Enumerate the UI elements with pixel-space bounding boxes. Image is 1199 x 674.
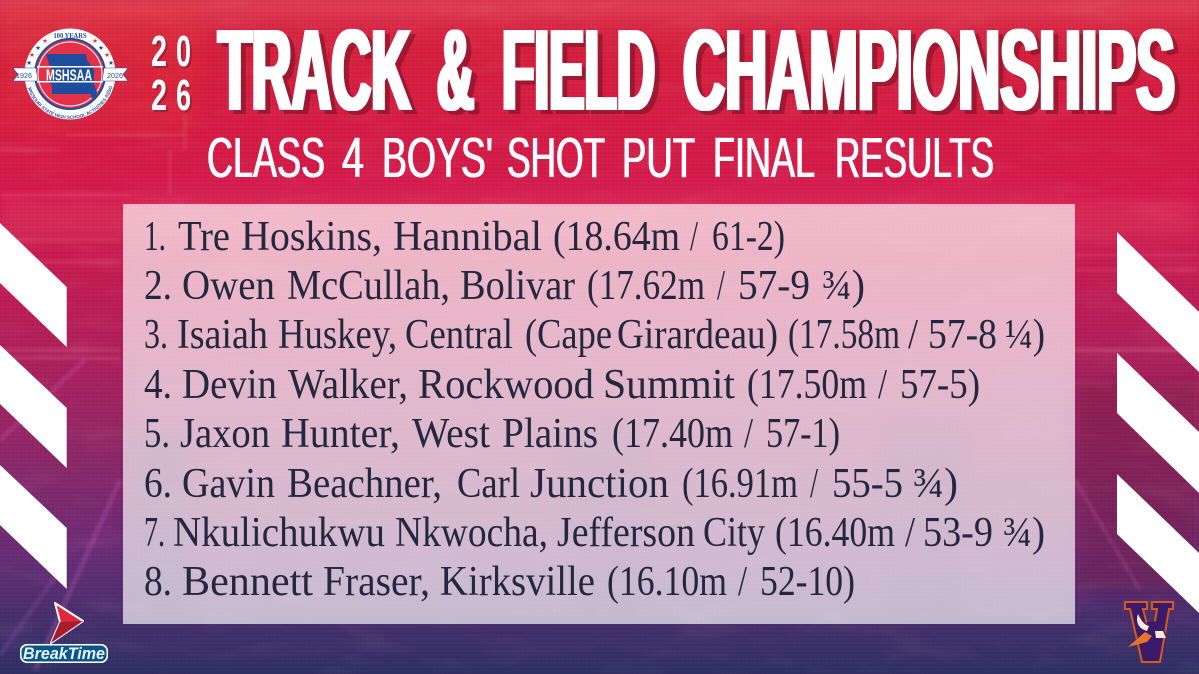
- panel: results list backdrop: [123, 204, 1075, 624]
- logo: BreakTime: [20, 603, 108, 663]
- result 3: 57-8: [928, 312, 997, 358]
- result 5: 57-1): [766, 411, 840, 457]
- result 6: 55-5: [832, 461, 903, 507]
- result 7: Nkwocha,: [395, 510, 548, 556]
- result 7: Jefferson: [557, 510, 695, 556]
- logo: MSHSAA 100 years: 1926: [16, 71, 32, 80]
- result 4: Walker,: [288, 362, 408, 408]
- result 5: Hunter,: [281, 411, 400, 457]
- result 5: [144, 411, 840, 457]
- result 3: [144, 312, 1045, 358]
- result 4: 4.: [144, 362, 172, 408]
- subtitle: BOYS': [382, 126, 493, 190]
- result 2: (17.62m: [587, 263, 705, 309]
- result 7: City: [703, 510, 765, 556]
- result 5: /: [744, 411, 753, 457]
- result 1: Hoskins,: [241, 214, 382, 260]
- result 6: Junction: [530, 461, 669, 507]
- result 8: Kirksville: [440, 559, 595, 605]
- subtitle: 4: [342, 126, 364, 190]
- result 3: Isaiah: [177, 312, 268, 358]
- result 8: Bennett: [182, 559, 313, 605]
- result 4: Rockwood: [418, 362, 594, 408]
- year: 2026 stacked: 2: [151, 27, 167, 76]
- logo: MSHSAA 100 years: MSHSAA: [46, 68, 92, 84]
- result 2: /: [717, 263, 725, 309]
- result 3: (Cape: [525, 312, 612, 358]
- result 7: [144, 510, 1045, 556]
- result 8: 52-10): [760, 559, 855, 605]
- result 6: /: [810, 461, 818, 507]
- logo: BreakTime: BreakTime: [23, 644, 105, 663]
- logo: MSHSAA 100 years: ★: [104, 51, 110, 59]
- result 4: Summit: [603, 362, 735, 408]
- year: 2026 stacked: 0: [176, 27, 191, 76]
- logo: MSHSAA 100 years: 100 YEARS: [54, 31, 86, 40]
- result 3: 3.: [144, 312, 168, 358]
- result 6: 6.: [144, 461, 172, 507]
- result 1: /: [690, 214, 698, 260]
- logo: MSHSAA 100 years: ★: [42, 37, 48, 45]
- logo: MSHSAA 100 years: ★: [26, 59, 32, 67]
- result 2: Owen: [182, 263, 275, 309]
- title: &: [437, 5, 474, 135]
- logo: MSHSAA 100 years: ★: [108, 59, 114, 67]
- result 1: (18.64m: [553, 214, 680, 260]
- result 6: [144, 461, 958, 507]
- result 4: (17.50m: [747, 362, 867, 408]
- result 3: Central: [405, 312, 513, 358]
- result 5: (17.40m: [612, 411, 733, 457]
- result 5: Jaxon: [180, 411, 270, 457]
- result 6: Gavin: [182, 461, 275, 507]
- result 3: /: [908, 312, 918, 358]
- year: 2026 stacked: [151, 27, 191, 120]
- result 1: 1.: [144, 214, 166, 260]
- result 6: ¾): [913, 461, 958, 507]
- result 1: [144, 214, 785, 260]
- year: 2026 stacked: 2: [151, 71, 167, 120]
- result 7: 53-9: [923, 510, 993, 556]
- result 2: 57-9: [738, 263, 810, 309]
- result 8: 8.: [144, 559, 172, 605]
- result 3: ¼): [1005, 312, 1045, 358]
- logo: MSHSAA 100 years: ★: [29, 51, 35, 59]
- stripes: left chevrons: [0, 223, 67, 589]
- result 2: 2.: [144, 263, 172, 309]
- results list: [144, 214, 1045, 605]
- subtitle: SHOT: [507, 126, 605, 190]
- result 2: [144, 263, 865, 309]
- result 5: Plains: [502, 411, 598, 457]
- subtitle: PUT: [622, 126, 695, 190]
- result 1: Tre: [178, 214, 230, 260]
- result 7: ¾): [1003, 510, 1045, 556]
- logo: MSHSAA 100 years: ★: [35, 44, 41, 52]
- subtitle: CLASS: [207, 126, 325, 190]
- subtitle: [207, 126, 994, 190]
- result 6: (16.91m: [682, 461, 798, 507]
- result 8: /: [738, 559, 747, 605]
- subtitle: FINAL: [713, 126, 815, 190]
- result 4: [144, 362, 980, 408]
- result 3: Girardeau): [617, 312, 778, 358]
- result 6: Beachner,: [287, 461, 442, 507]
- result 3: Huskey,: [278, 312, 397, 358]
- result 3: (17.58m: [788, 312, 900, 358]
- result 4: Devin: [182, 362, 277, 408]
- result 7: (16.40m: [775, 510, 895, 556]
- result 4: 57-5): [900, 362, 980, 408]
- result 7: Nkulichukwu: [173, 510, 385, 556]
- result 5: West: [412, 411, 490, 457]
- result 8: [144, 559, 855, 605]
- stripes: right chevrons: [1117, 232, 1199, 613]
- result 2: Bolivar: [460, 263, 575, 309]
- title: TRACK: [218, 5, 411, 135]
- logo: MSHSAA 100 years: ★: [92, 37, 98, 45]
- result 8: (16.10m: [607, 559, 727, 605]
- result 6: Carl: [457, 461, 520, 507]
- result 2: ¾): [822, 263, 865, 309]
- result 7: /: [905, 510, 915, 556]
- title: FIELD: [502, 5, 655, 135]
- result 2: McCullah,: [287, 263, 450, 309]
- result 7: 7.: [144, 510, 165, 556]
- year: 2026 stacked: 6: [176, 71, 191, 120]
- result 1: Hannibal: [393, 214, 542, 260]
- subtitle: RESULTS: [835, 126, 994, 190]
- logo: MSHSAA 100 years: ★: [98, 44, 104, 52]
- logo: Viking V: [1125, 602, 1173, 662]
- result 5: 5.: [144, 411, 170, 457]
- logo: MSHSAA 100 years: 2026: [107, 71, 123, 80]
- result 4: /: [878, 362, 887, 408]
- result 8: Fraser,: [323, 559, 430, 605]
- result 1: 61-2): [712, 214, 785, 260]
- logo: MSHSAA 100 years: [12, 28, 128, 120]
- title: [218, 5, 1175, 135]
